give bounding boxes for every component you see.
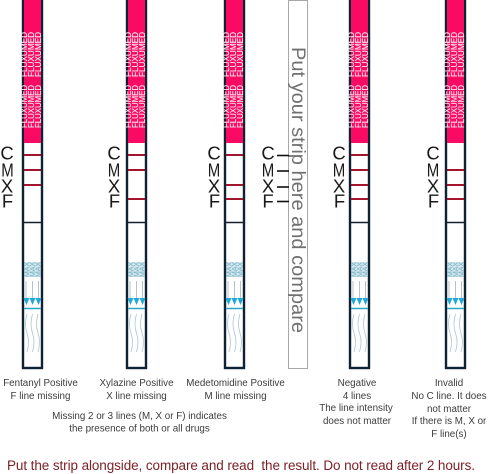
strip labels: negative: F bbox=[334, 190, 345, 212]
strip labels: medetomidine: F bbox=[209, 190, 220, 212]
strip: negative: FLUXUMED bbox=[347, 85, 356, 128]
strip labels: negative: M bbox=[333, 160, 345, 180]
strip: fentanyl positive: FLUXUMED bbox=[34, 32, 43, 77]
strip: medetomidine positive: FLUXUMED bbox=[229, 85, 238, 128]
caption: invalid bbox=[411, 378, 487, 440]
caption: fentanyl positive: Fentanyl Positive bbox=[3, 378, 78, 389]
caption: invalid: Invalid bbox=[435, 378, 463, 389]
compare labels with tick marks: M bbox=[262, 160, 274, 180]
caption: fentanyl positive bbox=[3, 378, 78, 402]
caption: fentanyl positive: F line missing bbox=[11, 391, 70, 402]
strip labels: fentanyl bbox=[0, 142, 14, 212]
caption: negative: 4 lines bbox=[343, 391, 371, 402]
strip labels: fentanyl: X bbox=[1, 176, 13, 196]
caption: xylazine positive: X line missing bbox=[106, 391, 167, 402]
compare labels with tick marks: C bbox=[261, 142, 275, 164]
strip: xylazine positive: FLUXUMED bbox=[131, 85, 140, 128]
caption: medetomidine positive bbox=[186, 378, 285, 402]
compare labels with tick marks: X bbox=[262, 176, 274, 196]
strip labels: fentanyl: M bbox=[1, 160, 14, 180]
caption: medetomidine positive: M line missing bbox=[204, 391, 267, 402]
strip labels: medetomidine bbox=[207, 142, 221, 212]
strip: xylazine positive: FLUXUMED bbox=[138, 85, 147, 128]
strip labels: fentanyl: C bbox=[0, 142, 14, 164]
strip: invalid: MAX bbox=[453, 262, 460, 277]
strip labels: fentanyl: F bbox=[2, 190, 13, 212]
strip labels: invalid: X bbox=[427, 176, 439, 196]
strip: medetomidine positive: MAX bbox=[232, 262, 239, 277]
caption: medetomidine positive: Medetomidine Positive bbox=[186, 378, 285, 389]
note: missing 2 or 3 lines: the presence of both or all drugs bbox=[69, 424, 210, 434]
strip labels: xylazine bbox=[107, 142, 121, 212]
strip: negative: FLUXUMED bbox=[354, 32, 363, 77]
strip: xylazine positive: FLUXUMED bbox=[138, 32, 147, 77]
strip: medetomidine positive: FLUXUMED bbox=[229, 32, 238, 77]
strip: xylazine positive: MAX bbox=[128, 262, 136, 277]
strip: invalid: FLUXUMED bbox=[450, 32, 459, 77]
strip labels: xylazine: M bbox=[108, 160, 120, 180]
strip: invalid: MAX bbox=[458, 262, 466, 277]
strip labels: negative bbox=[332, 142, 346, 212]
strip labels: xylazine: C bbox=[107, 142, 121, 164]
caption: invalid: not matter bbox=[427, 404, 472, 415]
strip: negative: FLUXUMED bbox=[361, 32, 370, 77]
strip labels: invalid: F bbox=[428, 190, 439, 212]
strip: invalid: FLUXUMED bbox=[450, 85, 459, 128]
strip labels: medetomidine: X bbox=[208, 176, 220, 196]
strip: invalid: FLUXUMED bbox=[457, 32, 466, 77]
strip: invalid bbox=[443, 0, 466, 368]
strip: negative bbox=[347, 0, 370, 368]
strip: xylazine positive: FLUXUMED bbox=[131, 32, 140, 77]
strip: fentanyl positive: FLUXUMED bbox=[27, 85, 36, 128]
strip: fentanyl positive: FLUXUMED bbox=[20, 32, 29, 77]
strip: xylazine positive bbox=[124, 0, 147, 368]
caption: xylazine positive bbox=[99, 378, 174, 402]
strip labels: invalid bbox=[426, 142, 440, 212]
strip labels: medetomidine: C bbox=[207, 142, 221, 164]
strip labels: negative: C bbox=[332, 142, 346, 164]
strip: negative: MAX bbox=[352, 262, 358, 277]
caption: negative: Negative bbox=[338, 378, 377, 389]
strip: xylazine positive: MAX bbox=[134, 262, 141, 277]
strip: fentanyl positive bbox=[20, 0, 43, 368]
strip: medetomidine positive: FLUXUMED bbox=[222, 32, 231, 77]
strip: invalid: FLUXUMED bbox=[443, 85, 452, 128]
caption: invalid: F line(s) bbox=[431, 429, 467, 440]
strip: negative: FLUXUMED bbox=[347, 32, 356, 77]
caption: xylazine positive: Xylazine Positive bbox=[99, 378, 174, 389]
strip: negative: MAX bbox=[362, 262, 370, 277]
strip: xylazine positive: MAX bbox=[140, 262, 146, 277]
compare labels with tick marks bbox=[261, 142, 289, 212]
strip: invalid: FLUXUMED bbox=[443, 32, 452, 77]
note: missing 2 or 3 lines: Missing 2 or 3 lines (M, X or F) indicates bbox=[52, 411, 227, 422]
strip: fentanyl positive: FLUXUMED bbox=[34, 85, 43, 128]
caption: negative: The line intensity bbox=[319, 403, 393, 414]
strip: medetomidine positive: FLUXUMED bbox=[236, 85, 245, 128]
strip: fentanyl positive: MAX bbox=[30, 262, 37, 277]
strip: medetomidine positive: FLUXUMED bbox=[236, 32, 245, 77]
strip: xylazine positive: FLUXUMED bbox=[124, 85, 133, 128]
strip labels: negative: X bbox=[333, 176, 345, 196]
strip: fentanyl positive: MAX bbox=[24, 262, 32, 277]
note: missing 2 or 3 lines bbox=[52, 411, 227, 434]
strip: medetomidine positive: MAX bbox=[226, 262, 234, 277]
caption: negative bbox=[319, 378, 393, 427]
strip: fentanyl positive: FLUXUMED bbox=[20, 85, 29, 128]
compare labels with tick marks: F bbox=[262, 190, 274, 212]
strip labels: xylazine: X bbox=[108, 176, 120, 196]
strip: negative: MAX bbox=[357, 262, 364, 277]
strip: invalid: FLUXUMED bbox=[457, 85, 466, 128]
strip: medetomidine positive: FLUXUMED bbox=[222, 85, 231, 128]
strip labels: invalid: M bbox=[427, 160, 439, 180]
strip: negative: FLUXUMED bbox=[354, 85, 363, 128]
caption: invalid: If there is M, X or bbox=[412, 416, 487, 427]
strip: medetomidine positive bbox=[222, 0, 245, 368]
strip: fentanyl positive: FLUXUMED bbox=[27, 32, 36, 77]
strip labels: invalid: C bbox=[426, 142, 440, 164]
footer instruction: Put the strip alongside, compare and read the result. Do not read after 2 hours. bbox=[7, 458, 475, 473]
caption: negative: does not matter bbox=[323, 416, 392, 427]
strip: xylazine positive: FLUXUMED bbox=[124, 32, 133, 77]
compare slot: put your strip here: Put your strip here and compare bbox=[287, 47, 308, 333]
strip: fentanyl positive: MAX bbox=[36, 262, 42, 277]
caption: invalid: No C line. It does bbox=[411, 391, 487, 402]
strip: negative: FLUXUMED bbox=[361, 85, 370, 128]
strip: medetomidine positive: MAX bbox=[238, 262, 244, 277]
strip labels: medetomidine: M bbox=[208, 160, 220, 180]
strip: invalid: MAX bbox=[448, 262, 454, 277]
strip labels: xylazine: F bbox=[109, 190, 120, 212]
